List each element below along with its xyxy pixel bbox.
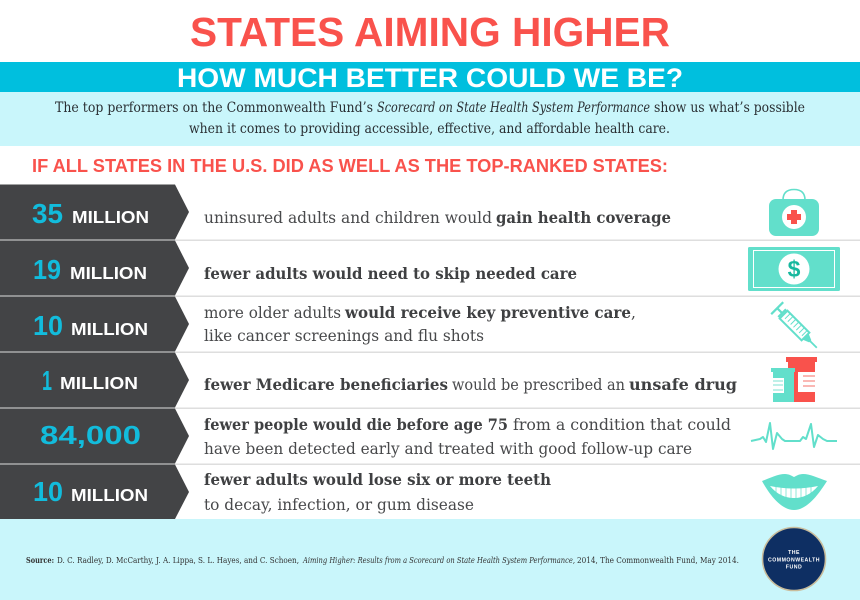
row 3: 10 million: would receive key preventive care	[344, 303, 631, 322]
section heading: IF ALL STATES IN THE U.S. DID AS WELL AS THE TOP-RANKED STATES:	[32, 156, 668, 176]
row 3: 10 million: MILLION	[71, 319, 148, 339]
row 1: 35 million: uninsured adults and children would	[204, 209, 492, 227]
row 6: 10 million: MILLION	[71, 485, 148, 505]
row 3: 10 million: ,	[631, 304, 636, 322]
row 4: 1 million: fewer Medicare beneficiaries	[204, 375, 448, 394]
row 2: 19 million: 19	[33, 254, 61, 285]
icon: dollar bill	[748, 247, 840, 291]
icon: smile lips	[762, 474, 827, 510]
row 3: 10 million: 10	[33, 310, 63, 341]
icon: medical bag	[769, 190, 819, 236]
logo: The Commonwealth Fund: COMMONWEALTH	[768, 558, 820, 564]
footer panel: Source:	[26, 555, 54, 565]
row 4: 1 million: would be prescribed an	[452, 376, 625, 394]
row 5: 84,000: fewer people would die before age 75	[204, 415, 508, 434]
row 2: 19 million: fewer adults would need to skip needed care	[204, 264, 577, 283]
row 2: 19 million: MILLION	[70, 263, 147, 283]
row 1: 35 million: MILLION	[72, 207, 149, 227]
row 5: 84,000: have been detected early and treated with good follow-up care	[204, 440, 692, 458]
intro panel	[0, 92, 860, 146]
row 2: 19 million	[0, 240, 577, 296]
row 4: 1 million: 1	[42, 365, 52, 396]
intro panel: when it comes to providing accessible, effective, and affordable health care.	[189, 121, 670, 137]
subtitle banner	[0, 62, 860, 93]
row 3: 10 million	[0, 296, 636, 352]
row 6: 10 million: to decay, infection, or gum disease	[204, 496, 474, 514]
row 4: 1 million: unsafe drug	[629, 375, 737, 394]
row 4: 1 million: MILLION	[60, 373, 138, 393]
row 4: 1 million	[0, 352, 737, 408]
row 3: 10 million: like cancer screenings and flu shots	[204, 327, 484, 345]
logo: The Commonwealth Fund: THE	[788, 550, 800, 556]
footer panel	[0, 519, 860, 600]
row 3: 10 million: more older adults	[204, 304, 341, 322]
row 5: 84,000: from a condition that could	[513, 416, 731, 434]
footer panel: Aiming Higher: Results from a Scorecard on State Health System Performance,	[302, 556, 575, 565]
row 6: 10 million: 10	[33, 476, 63, 507]
icon: dollar bill: $	[788, 256, 801, 282]
logo: The Commonwealth Fund: FUND	[786, 564, 802, 570]
row 6: 10 million	[0, 464, 551, 519]
intro panel: Scorecard on State Health System Performance	[377, 100, 650, 116]
title: STATES AIMING HIGHER	[190, 9, 670, 55]
icon: syringe	[771, 302, 823, 354]
row 6: 10 million: fewer adults would lose six or more teeth	[204, 470, 551, 489]
row 1: 35 million: gain health coverage	[496, 208, 671, 227]
footer panel: 2014, The Commonwealth Fund, May 2014.	[577, 556, 739, 565]
row 1: 35 million: 35	[32, 198, 63, 229]
row 5: 84,000	[0, 408, 731, 464]
row 1: 35 million	[0, 184, 671, 240]
row 5: 84,000: 84,000	[40, 420, 141, 450]
footer panel: D. C. Radley, D. McCarthy, J. A. Lippa, S. L. Hayes, and C. Schoen,	[57, 556, 299, 565]
logo: The Commonwealth Fund	[762, 528, 826, 590]
icon: heartbeat line	[751, 423, 837, 449]
icon: pill bottles	[771, 357, 817, 402]
intro panel: show us what’s possible	[654, 100, 805, 116]
intro panel: The top performers on the Commonwealth Fund’s	[55, 100, 373, 116]
subtitle banner: HOW MUCH BETTER COULD WE BE?	[177, 63, 683, 93]
